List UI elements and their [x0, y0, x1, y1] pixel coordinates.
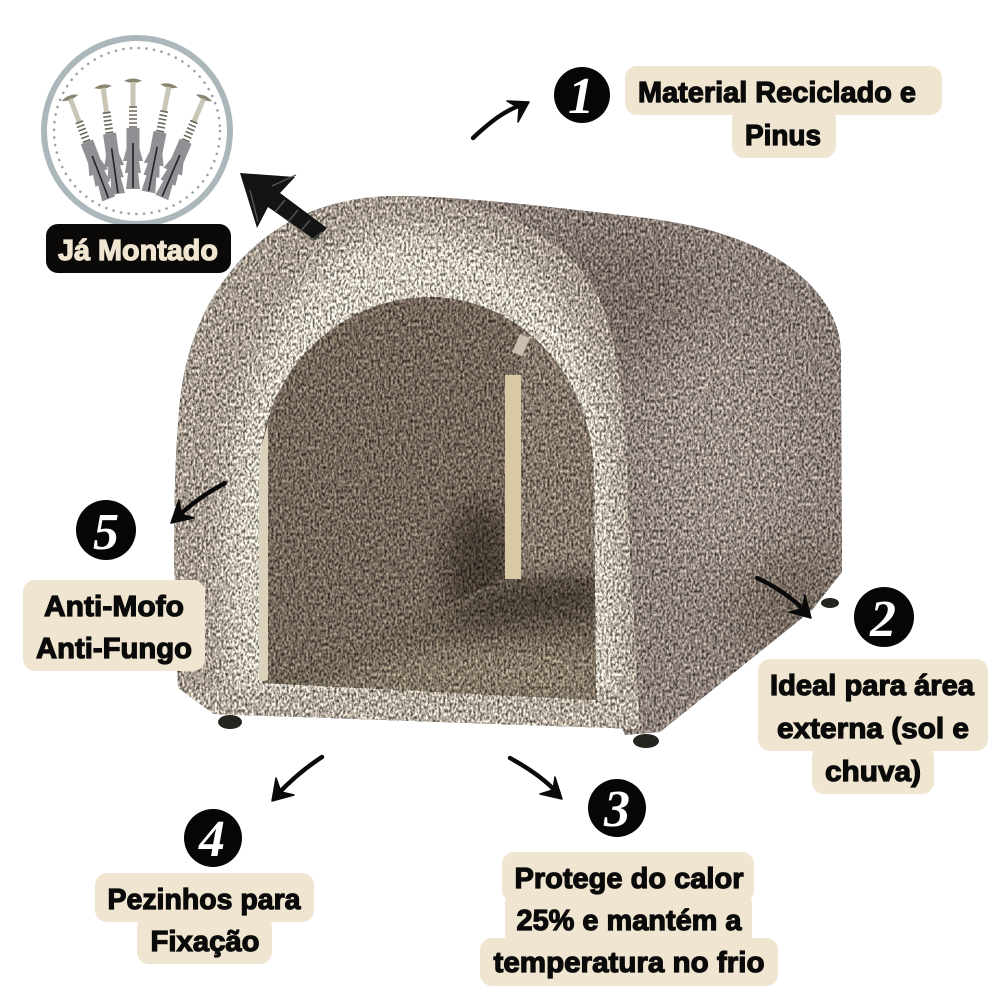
label 4 [95, 873, 314, 964]
label 1 [625, 66, 942, 158]
label 2: chuva) [825, 756, 921, 788]
arrow 5 [171, 483, 225, 523]
callout 3 [480, 758, 778, 986]
arrow 4 [272, 757, 322, 801]
label 3: temperatura no frio [494, 947, 764, 979]
label 4: Fixação [150, 926, 260, 958]
house side wall [390, 190, 850, 750]
callout 5 [23, 483, 225, 671]
arrow 1 [473, 101, 529, 138]
arrow: scribbled to roof [240, 173, 329, 240]
badge 5: 5 [93, 504, 119, 561]
badge 4 [184, 809, 242, 868]
label 3: Protege do calor [514, 863, 744, 895]
label 1: Pinus [745, 120, 821, 152]
dog house photo [170, 190, 850, 750]
bracket [512, 334, 530, 356]
label 2 [758, 659, 988, 794]
badge 1 [554, 67, 610, 125]
callout 1 [473, 66, 942, 158]
label 5: Anti-Fungo [36, 633, 192, 665]
label 3: 25% e mantém a [516, 905, 742, 937]
feet [218, 598, 839, 748]
label 5: Anti-Mofo [44, 591, 184, 623]
label 2: externa (sol e [777, 713, 969, 745]
wooden post [505, 375, 521, 579]
badge 2: 2 [869, 591, 896, 648]
label 4: Pezinhos para [108, 884, 301, 916]
badge 5 [76, 500, 136, 561]
arch opening interior [255, 290, 601, 710]
label: Já Montado [46, 224, 231, 273]
label 3 [480, 852, 778, 986]
house front rim [170, 190, 650, 740]
badge 3 [588, 779, 646, 838]
fixing screws badge [44, 38, 230, 224]
badge 2 [854, 587, 914, 648]
callout 2 [757, 578, 988, 794]
floor [262, 578, 600, 702]
left wooden trim [259, 425, 268, 682]
arrow 3 [510, 758, 562, 799]
badge 4: 4 [198, 811, 225, 868]
badge 1: 1 [568, 68, 594, 125]
label 5 [23, 580, 205, 671]
label 1: Material Reciclado e [638, 77, 916, 109]
callout 4 [95, 757, 322, 964]
badge 3: 3 [603, 781, 630, 838]
arrow 2 [757, 578, 811, 618]
label 2: Ideal para área [770, 670, 975, 702]
label: Já Montado: Já Montado [58, 235, 218, 267]
